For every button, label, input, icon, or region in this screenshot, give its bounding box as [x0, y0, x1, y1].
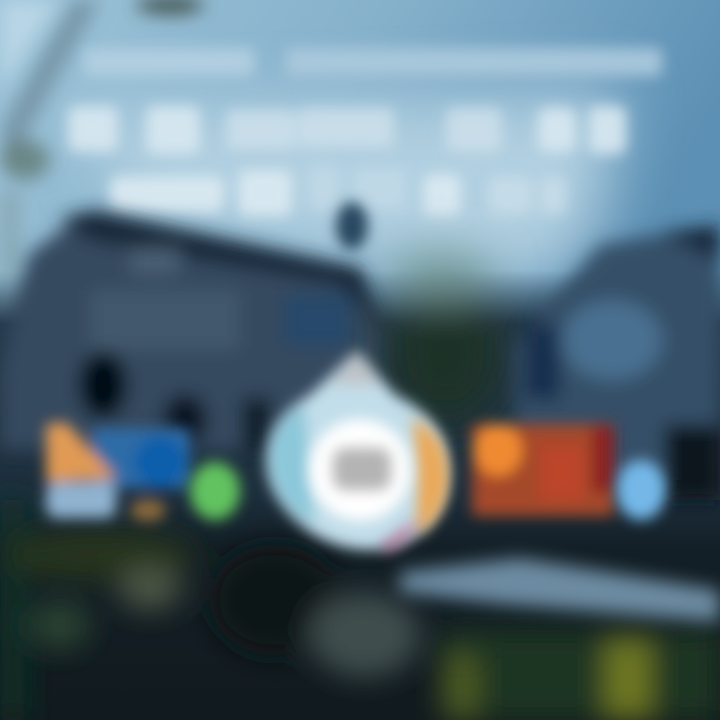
donut outer body	[266, 350, 448, 550]
ground foliage	[0, 500, 720, 720]
blue card	[92, 428, 190, 488]
orange lower patch	[130, 499, 166, 521]
lower scene background	[0, 270, 720, 720]
title line 1 continued	[286, 48, 662, 76]
light blue band	[46, 482, 116, 518]
pathway / water reflection	[400, 558, 720, 622]
icon: left chart card	[46, 422, 190, 521]
donut orange segment	[412, 418, 448, 534]
title line 1	[84, 48, 254, 76]
icon: red-orange card	[472, 424, 614, 516]
bright sky glow behind title	[70, 90, 620, 285]
title line 2 words	[68, 106, 626, 154]
donut centre label	[333, 448, 391, 490]
donut pink segment	[380, 518, 418, 552]
icon: green dot	[190, 462, 240, 520]
title line 3 words	[110, 166, 566, 216]
sky background	[0, 0, 720, 360]
title block	[68, 48, 662, 216]
icon: blue dot	[616, 460, 666, 520]
trees centre	[385, 250, 505, 425]
house: left	[0, 210, 390, 450]
house: right	[515, 225, 720, 500]
tree branches top left	[0, 0, 204, 280]
donut white ring	[316, 426, 404, 514]
orange triangle	[46, 422, 116, 482]
chimney silhouette	[336, 202, 368, 250]
donut chart centre	[266, 350, 448, 552]
